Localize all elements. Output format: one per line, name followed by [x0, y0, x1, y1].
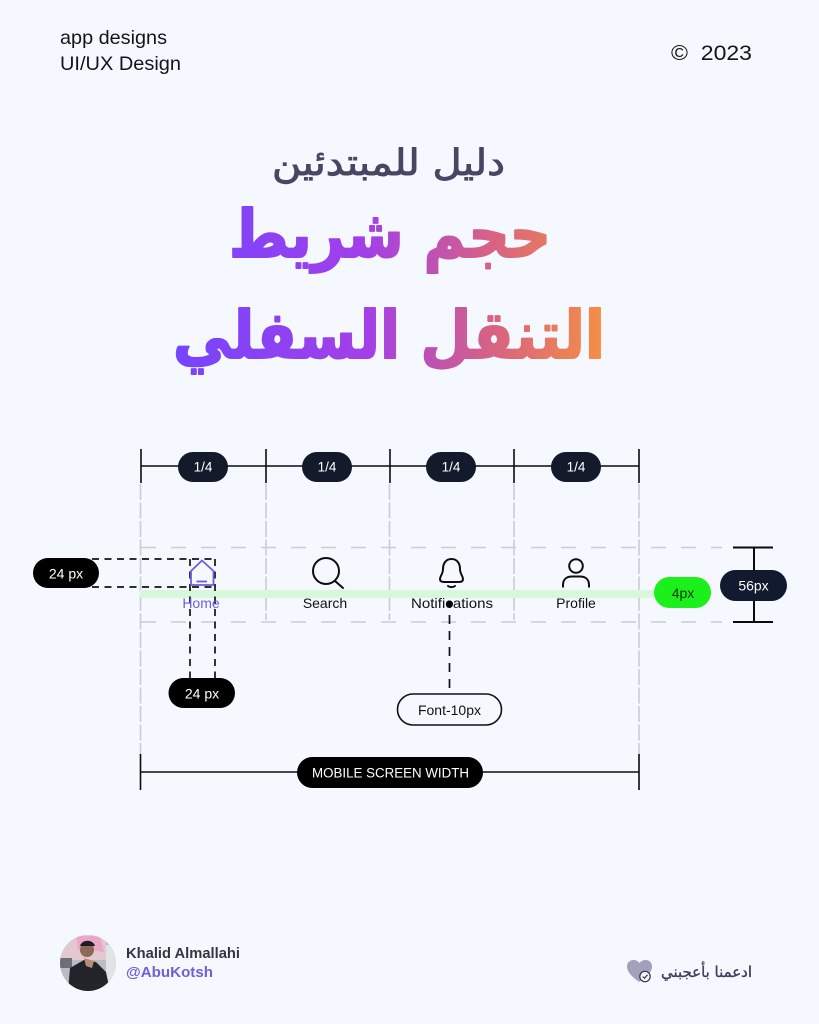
pill: 4px bar height — [654, 577, 711, 608]
label: profile: Profile — [556, 595, 596, 611]
pill: 4px bar height: 4px — [672, 585, 694, 601]
title: التنقل السفلي — [173, 297, 605, 374]
pill: 1/4 column four: 1/4 — [567, 460, 586, 474]
title: حجم شريط — [229, 196, 551, 273]
pill: 56px: 56px — [738, 578, 769, 594]
icon: home — [191, 560, 214, 585]
leader dot — [446, 600, 453, 608]
icon: search — [313, 558, 343, 588]
tab: profile — [556, 559, 596, 611]
avatar — [60, 935, 116, 991]
icon size measure: black dashed guides — [92, 559, 215, 678]
call to action: ادعمنا بأعجبني — [661, 961, 752, 982]
tab: search — [303, 558, 347, 611]
pill: 1/4 column two — [302, 452, 352, 482]
tab: home — [182, 560, 220, 611]
green 4px indicator bar — [140, 590, 665, 598]
guide lines: grey dashed grid — [140, 484, 722, 755]
header: app designs label: app designs — [60, 27, 167, 49]
pill: 24 px width: 24 px — [185, 686, 219, 702]
author name: Khalid Almallahi — [126, 946, 240, 962]
icon: bell — [440, 559, 463, 587]
pill: 24 px height — [33, 558, 99, 588]
pill: 1/4 column three: 1/4 — [442, 460, 461, 474]
dashed leader — [448, 615, 450, 694]
header: copyright year: © 2023 — [671, 41, 752, 65]
bottom ruler: mobile screen width — [140, 754, 639, 790]
tab: notifications — [411, 559, 493, 611]
pill: mobile screen width: MOBILE SCREEN WIDTH — [312, 766, 469, 780]
icon: heart with check — [627, 960, 652, 982]
pill: Font-10px: Font-10px — [418, 702, 481, 718]
subtitle: دليل للمبتدئين — [272, 143, 505, 184]
pill: 1/4 column one — [178, 452, 228, 482]
pill: 24 px height: 24 px — [49, 566, 83, 582]
pill: mobile screen width — [297, 757, 483, 788]
pill: 1/4 column three — [426, 452, 476, 482]
pill: 1/4 column four — [551, 452, 601, 482]
font size callout — [398, 600, 502, 725]
56px height measure — [720, 548, 787, 622]
author handle: @AbuKotsh — [126, 965, 213, 981]
top ruler: column widths — [141, 449, 639, 483]
icon: profile — [563, 559, 589, 588]
header: app designs label — [60, 27, 181, 75]
pill: 1/4 column one: 1/4 — [194, 460, 213, 474]
title — [173, 196, 605, 374]
header: app designs label: UI/UX Design — [60, 53, 181, 75]
label: notifications: Notifications — [411, 595, 493, 611]
pill: 1/4 column two: 1/4 — [318, 460, 337, 474]
label: home: Home — [182, 595, 220, 611]
label: search: Search — [303, 595, 347, 611]
pill: 24 px width — [168, 678, 235, 708]
